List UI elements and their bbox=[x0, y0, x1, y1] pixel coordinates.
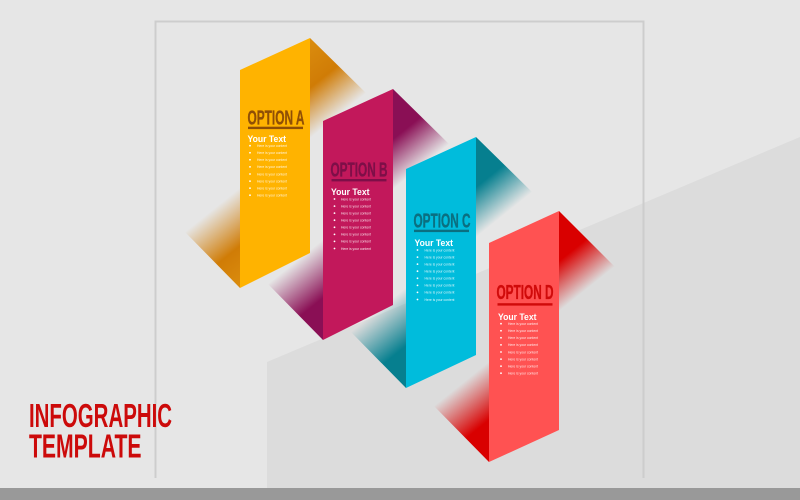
bullet list: Here is your content bbox=[424, 255, 454, 259]
bullet list: Here is your content bbox=[257, 194, 287, 198]
fold: option C lower bbox=[351, 286, 406, 388]
fold: option C upper bbox=[476, 137, 532, 239]
fold: option A upper bbox=[310, 38, 366, 140]
fold: option D lower bbox=[434, 360, 489, 462]
bullet list: Here is your content bbox=[424, 298, 454, 302]
fold: option B lower bbox=[268, 238, 323, 340]
bullet list: Here is your content bbox=[257, 165, 287, 169]
panel: option A bbox=[240, 38, 310, 288]
bullet list bbox=[249, 144, 287, 198]
bullet list: Here is your content bbox=[341, 204, 371, 208]
bullet list: Here is your content bbox=[508, 372, 538, 376]
bullet list: Here is your content bbox=[257, 158, 287, 162]
heading: option B: OPTION B bbox=[330, 158, 388, 182]
bullet list: Here is your content bbox=[424, 262, 454, 266]
bullet list: Here is your content bbox=[341, 247, 371, 251]
subheading: Your Text bbox=[498, 312, 537, 323]
bullet list: Here is your content bbox=[508, 336, 538, 340]
bullet list bbox=[334, 197, 371, 251]
heading rule bbox=[414, 230, 469, 232]
bullet list bbox=[417, 248, 454, 302]
panel: option C bbox=[406, 137, 476, 388]
heading rule bbox=[332, 179, 386, 181]
title bbox=[29, 397, 172, 464]
bullet list bbox=[500, 322, 538, 376]
bullet list: Here is your content bbox=[424, 284, 454, 288]
bullet list: Here is your content bbox=[508, 329, 538, 333]
fold: option A lower bbox=[185, 186, 240, 288]
background darker diagonal area bbox=[267, 137, 800, 488]
title: TEMPLATE bbox=[29, 428, 142, 464]
bullet list: Here is your content bbox=[508, 357, 538, 361]
bullet list: Here is your content bbox=[257, 172, 287, 176]
subheading: Your Text bbox=[248, 134, 287, 145]
fold: option B upper bbox=[393, 89, 449, 191]
bullet list: Here is your content bbox=[424, 291, 454, 295]
heading: option D: OPTION D bbox=[496, 281, 554, 304]
bullet list: Here is your content bbox=[257, 144, 287, 148]
frame bbox=[156, 22, 644, 478]
bullet list: Here is your content bbox=[341, 233, 371, 237]
subheading: Your Text bbox=[414, 238, 454, 249]
fold: option D upper bbox=[559, 211, 615, 313]
bullet list: Here is your content bbox=[341, 197, 371, 201]
heading: option A: OPTION A bbox=[248, 106, 305, 130]
bottom bar bbox=[0, 488, 800, 500]
subheading: Your Text bbox=[331, 187, 370, 198]
bullet list: Here is your content bbox=[341, 218, 371, 222]
bullet list: Here is your content bbox=[424, 248, 454, 252]
bullet list: Here is your content bbox=[508, 364, 538, 368]
heading rule bbox=[248, 127, 303, 129]
title: INFOGRAPHIC bbox=[29, 397, 172, 434]
bullet list: Here is your content bbox=[341, 240, 371, 244]
heading: option C: OPTION C bbox=[414, 210, 471, 232]
heading rule bbox=[498, 303, 552, 306]
bullet list: Here is your content bbox=[424, 277, 454, 281]
panel: option D bbox=[489, 211, 559, 462]
bullet list: Here is your content bbox=[508, 322, 538, 326]
panel: option B bbox=[323, 89, 393, 340]
bullet list: Here is your content bbox=[257, 179, 287, 183]
bullet list: Here is your content bbox=[508, 343, 538, 347]
bullet list: Here is your content bbox=[341, 226, 371, 230]
bullet list: Here is your content bbox=[257, 186, 287, 190]
bullet list: Here is your content bbox=[508, 350, 538, 354]
bullet list: Here is your content bbox=[424, 270, 454, 274]
bullet list: Here is your content bbox=[341, 211, 371, 215]
bullet list: Here is your content bbox=[257, 151, 287, 155]
